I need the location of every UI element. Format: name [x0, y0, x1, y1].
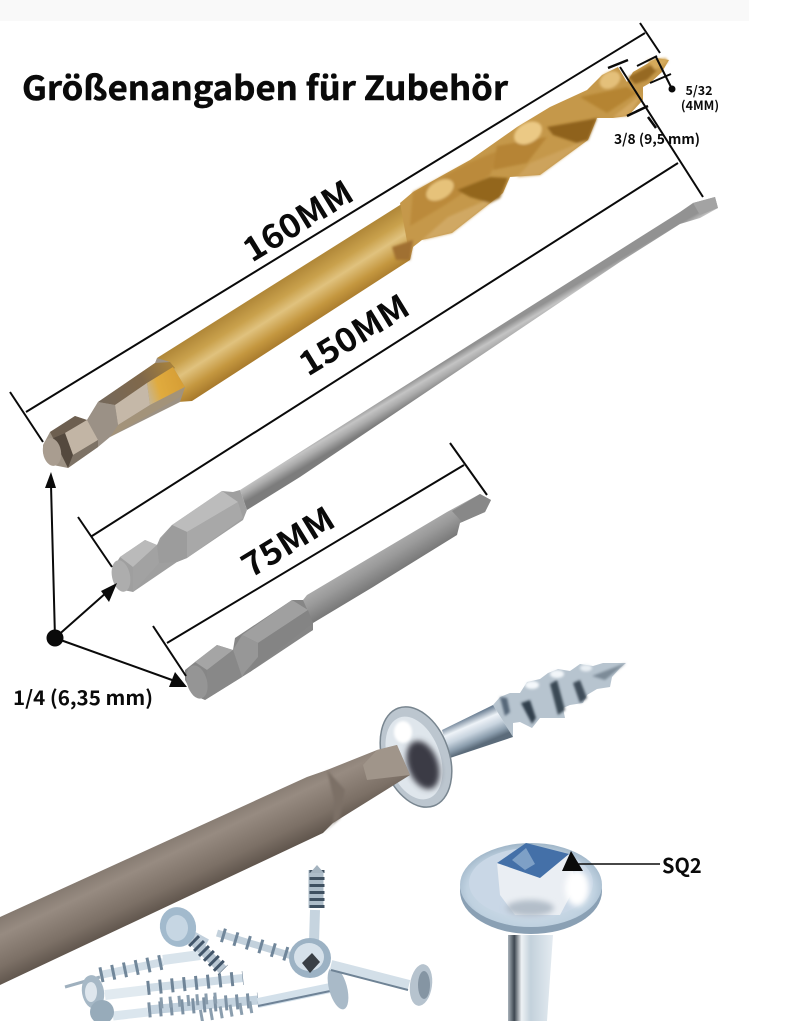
- label: 5/32 (4MM): [681, 80, 719, 114]
- screw: center head with square socket: [289, 938, 331, 978]
- screw: vertical with coarse tip: [310, 865, 324, 942]
- dimension 3/8 flute: [608, 60, 656, 128]
- short hex head: [195, 645, 233, 670]
- collar shading: [323, 770, 345, 833]
- dimension 5/32 tip: [637, 56, 672, 89]
- short shaft: [295, 494, 491, 640]
- flat on bit tip: [363, 745, 410, 780]
- label: 3/8 (9,5 mm): 3/8 (9,5 mm): [614, 129, 700, 149]
- screw: left middle: [79, 973, 243, 1011]
- dot: 5/32 leader: [668, 86, 676, 92]
- drill hex silhouette: [43, 358, 185, 468]
- label: 150MM: 150MM: [288, 281, 417, 385]
- screw: bottom left head: [90, 1000, 114, 1021]
- pocket screw with washer head: [367, 663, 626, 817]
- arrowhead up: [45, 472, 56, 488]
- screw: left upper: [65, 955, 200, 987]
- screw head closeup: SQ2 socket: [460, 843, 602, 1021]
- screw: diagonal threaded: [217, 933, 292, 956]
- bit: grey 150 mm: [109, 197, 718, 594]
- arrowhead middle: [101, 583, 117, 602]
- label: 160MM: 160MM: [232, 167, 361, 271]
- dimension 150 mm: [78, 67, 703, 567]
- drill hex facets: [98, 362, 175, 405]
- label: 5/32 (4MM): 5/32: [686, 80, 712, 99]
- washer dark recess: [400, 736, 446, 794]
- grey shaft: [240, 197, 718, 510]
- socket walls: [497, 854, 576, 915]
- screw threaded section: [493, 663, 626, 737]
- bit: grey 75 mm: [183, 494, 491, 701]
- drill hex head: [50, 416, 87, 438]
- label SQ2: SQ2: [662, 850, 702, 879]
- grey hex head: [120, 540, 157, 567]
- title: Größenangaben für Zubehör: [22, 62, 509, 110]
- label: 75MM: 75MM: [231, 493, 343, 587]
- arrows: 1/4 hex callout: [45, 472, 187, 687]
- drill bit: titanium gold 160 mm: [41, 58, 669, 468]
- arrowhead: [562, 851, 583, 871]
- short hex silhouette: [185, 600, 313, 700]
- closeup head: [460, 848, 602, 934]
- screw: lower right long: [200, 964, 352, 1016]
- drill smooth shank: [157, 190, 420, 402]
- large bit tip in screw: [0, 745, 410, 985]
- drill flutes: [400, 58, 669, 258]
- label: 5/32 (4MM): (4MM): [681, 95, 719, 114]
- pile of screws: [65, 865, 435, 1021]
- screw: lower threaded: [113, 998, 258, 1016]
- dimension 75 mm: [153, 443, 487, 676]
- screw: top left head: [155, 903, 223, 970]
- callout dot: [46, 630, 64, 646]
- screw smooth shaft: [442, 705, 513, 758]
- washer bowl: [375, 709, 453, 807]
- short hex facets: [242, 600, 308, 643]
- grey tip: [693, 197, 718, 215]
- grey hex facets: [172, 491, 238, 532]
- washer rim: [367, 697, 465, 817]
- dimension 160 mm: [10, 23, 660, 442]
- washer highlight: [394, 721, 412, 743]
- dimension lines: [10, 23, 703, 676]
- short tip facet: [452, 494, 491, 522]
- closeup shaft: [508, 935, 553, 1021]
- blue square socket: [497, 843, 569, 878]
- screw: right with side head: [331, 963, 435, 1007]
- arrowhead lower: [169, 672, 187, 687]
- grey hex silhouette: [113, 490, 247, 592]
- SQ2 callout: [562, 850, 702, 879]
- label: 1/4 (6,35 mm): 1/4 (6,35 mm): [13, 682, 153, 711]
